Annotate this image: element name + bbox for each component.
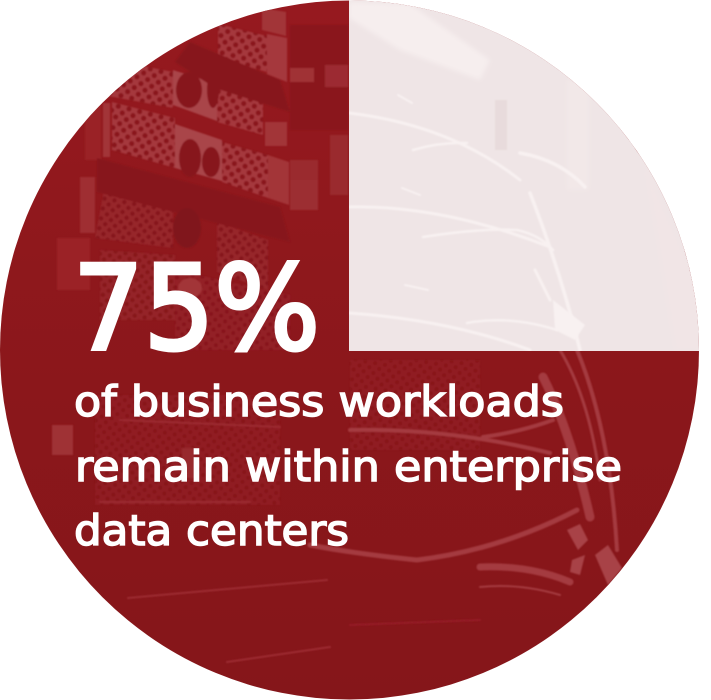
- panel: pale top-right quadrant: [349, 0, 711, 351]
- text line 2: remain within enterprise: [75, 442, 622, 491]
- photo: server rack faceplates: [52, 8, 622, 662]
- photo: washed out cables: [349, 6, 586, 351]
- photo: lower cables: [100, 350, 617, 662]
- photo: dark rack shelves: [97, 42, 290, 242]
- photo: lower rack panels: [52, 415, 480, 504]
- stat: 75%: 75%: [73, 240, 320, 377]
- text line 1: of business workloads: [74, 377, 564, 426]
- text block: statistic description: [74, 377, 622, 555]
- text line 3: data centers: [74, 506, 349, 555]
- photo: rack fans: [173, 72, 220, 298]
- photo: lower connectors: [567, 524, 622, 585]
